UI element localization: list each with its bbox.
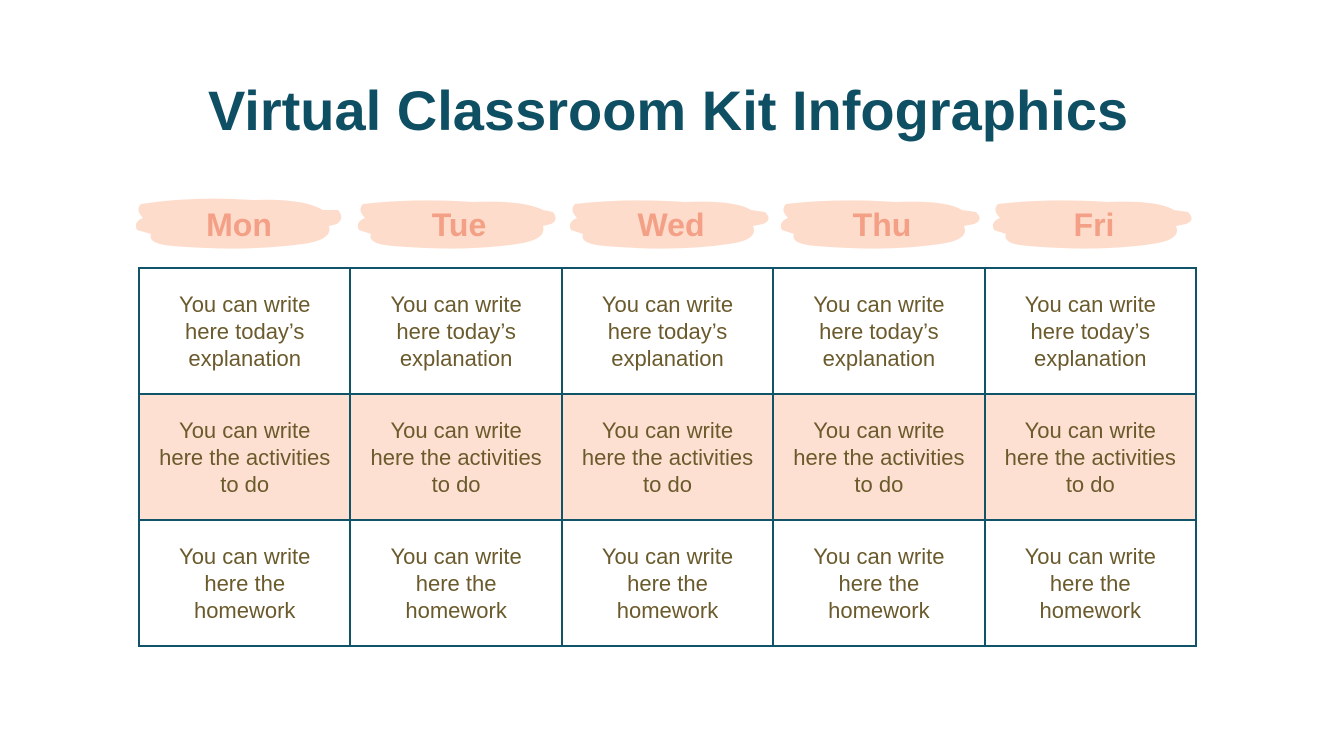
schedule table: to do [432,472,481,496]
schedule table: here the activities [159,444,330,470]
day header: Thu [780,200,980,249]
schedule table: here the activities [370,444,542,470]
schedule table: here today’s [1031,318,1150,344]
schedule table: You can write [1025,544,1156,568]
schedule table: You can write [602,544,733,568]
day header: Thu: Thu [853,207,911,243]
schedule table: homework [405,598,507,622]
schedule table: homework [194,598,295,622]
schedule table: to do [1066,472,1115,496]
schedule table: You can write [390,292,522,316]
day header: Wed [570,200,768,249]
schedule table: You can write [1025,418,1156,442]
schedule table: here the [204,570,285,596]
schedule table: to do [643,472,692,496]
schedule table: You can write [813,418,944,442]
day header: Wed: Wed [638,207,704,243]
schedule table: explanation [611,346,724,370]
schedule table: You can write [602,418,733,442]
schedule table: here today’s [185,318,304,344]
schedule table: here the activities [1005,444,1176,470]
schedule table: You can write [813,292,944,316]
day header: Fri [992,200,1192,249]
schedule table: explanation [400,346,512,370]
schedule table: here the [1050,570,1131,596]
schedule table: You can write [1025,292,1156,316]
schedule table: here the [627,570,708,596]
schedule table: homework [828,598,930,622]
schedule table: You can write [390,544,522,568]
schedule table: You can write [602,292,733,316]
schedule table: here today’s [819,318,939,344]
schedule table: You can write [179,292,310,316]
schedule table: here the [838,570,919,596]
schedule table: homework [1040,598,1141,622]
day header: Fri: Fri [1074,207,1114,243]
day header: Mon [136,198,342,249]
schedule table: here the [416,570,496,596]
schedule table: You can write [390,418,522,442]
title: Virtual Classroom Kit Infographics [208,79,1128,142]
schedule table: to do [220,472,269,496]
schedule table: to do [854,472,903,496]
schedule table: explanation [188,346,301,370]
day header: Tue [358,200,556,249]
schedule table: here the activities [582,444,753,470]
schedule table: You can write [179,418,310,442]
day header: Mon: Mon [206,207,272,243]
schedule table: here today’s [396,318,516,344]
schedule table: explanation [1034,346,1147,370]
day header: Tue: Tue [432,207,486,243]
schedule table: You can write [813,544,944,568]
schedule table: homework [617,598,718,622]
schedule table: here today’s [608,318,727,344]
schedule table: explanation [823,346,935,370]
schedule table [138,267,1197,647]
schedule table: You can write [179,544,310,568]
schedule table: here the activities [793,444,964,470]
